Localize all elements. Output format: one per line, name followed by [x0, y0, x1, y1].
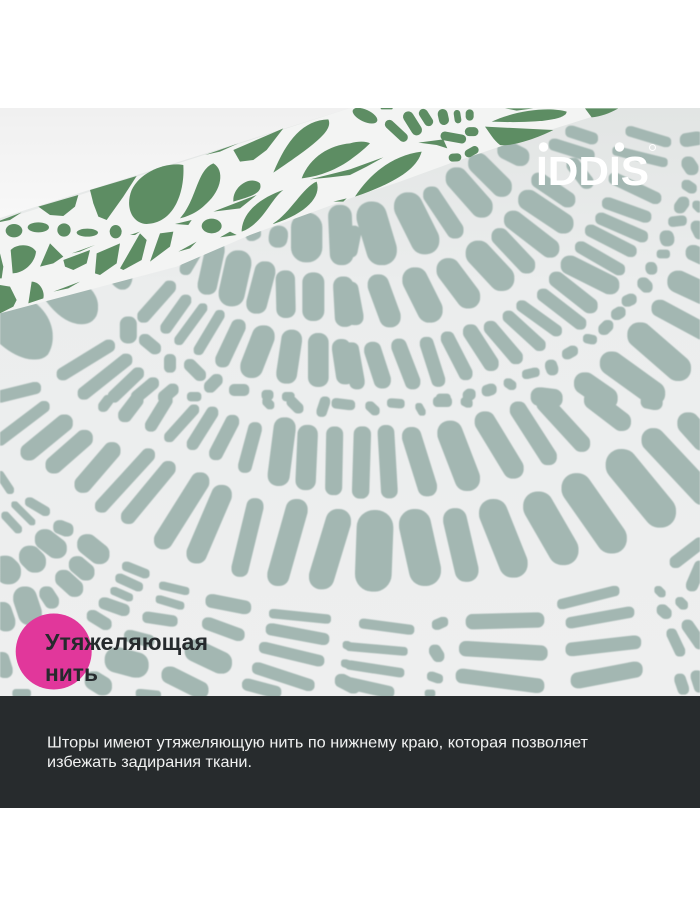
description text: [47, 734, 589, 771]
pattern, lower left: [0, 400, 353, 695]
green printed leaves on the fold, right part: [350, 105, 618, 197]
green printed leaves on the fold: [0, 119, 383, 313]
logo: IDDIS: IDDIS: [536, 148, 649, 194]
printed pattern seen through fabric: [0, 131, 700, 695]
description text: избежать задирания ткани.: [47, 754, 252, 771]
folded fabric top hem: [0, 105, 620, 313]
pattern, upper right: [350, 131, 700, 398]
photo: curtain fabric with pattern: [0, 105, 700, 696]
pattern, upper left: [0, 217, 345, 397]
pink badge circle: [16, 614, 92, 690]
area above the fold: [0, 108, 350, 218]
heading: Утяжеляющая нить: нить: [45, 660, 98, 686]
pattern, lower right: [350, 400, 700, 693]
heading: Утяжеляющая нить: Утяжеляющая: [45, 629, 208, 655]
dark description band: [0, 696, 700, 808]
description text: Шторы имеют утяжеляющую нить по нижнему краю, которая позволяет: [47, 734, 589, 752]
heading: Утяжеляющая нить: [45, 629, 208, 686]
